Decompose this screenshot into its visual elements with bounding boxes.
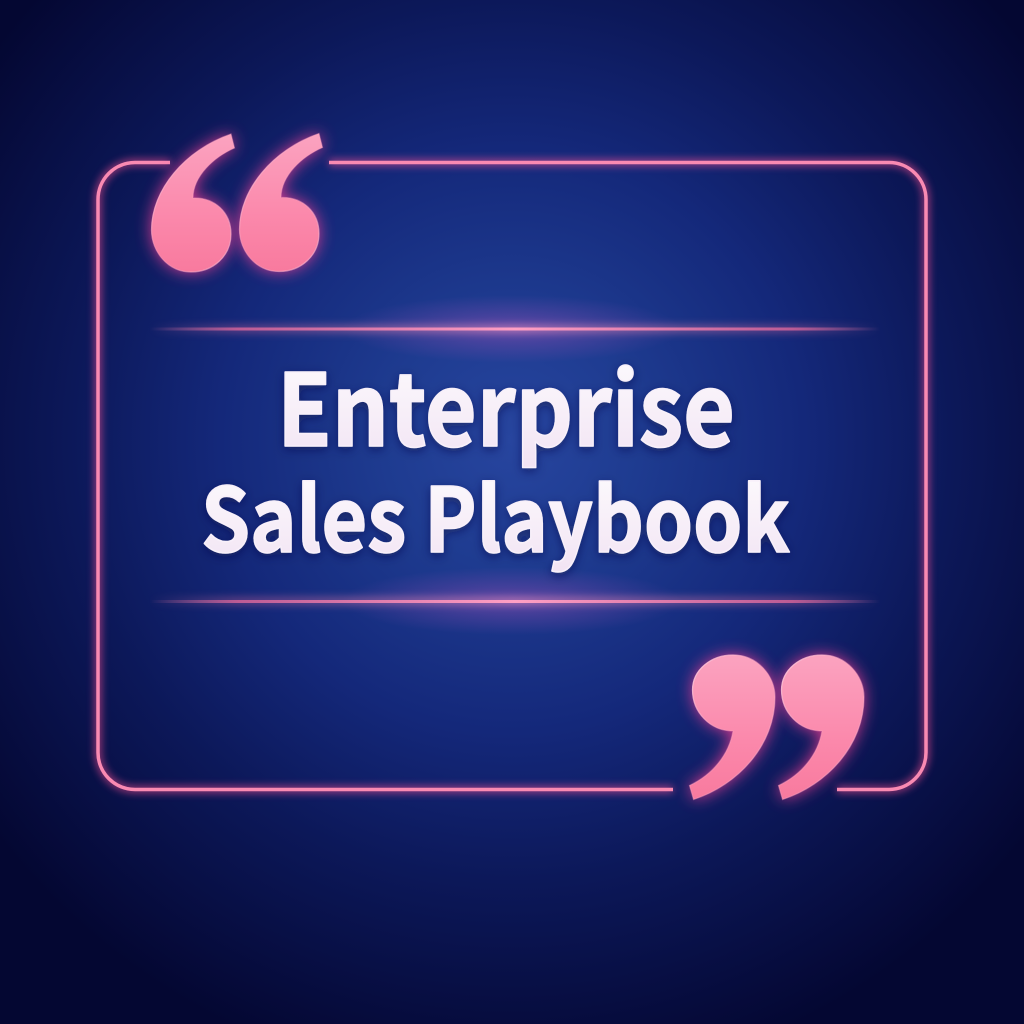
title: Enterprise — [277, 330, 735, 475]
top divider — [150, 325, 880, 333]
title: Sales Playbook — [201, 449, 790, 578]
icon: opening quotation marks — [152, 134, 322, 272]
bottom divider — [150, 597, 880, 605]
title — [201, 330, 790, 578]
quote frame — [98, 162, 926, 790]
icon: closing quotation marks — [690, 655, 864, 800]
